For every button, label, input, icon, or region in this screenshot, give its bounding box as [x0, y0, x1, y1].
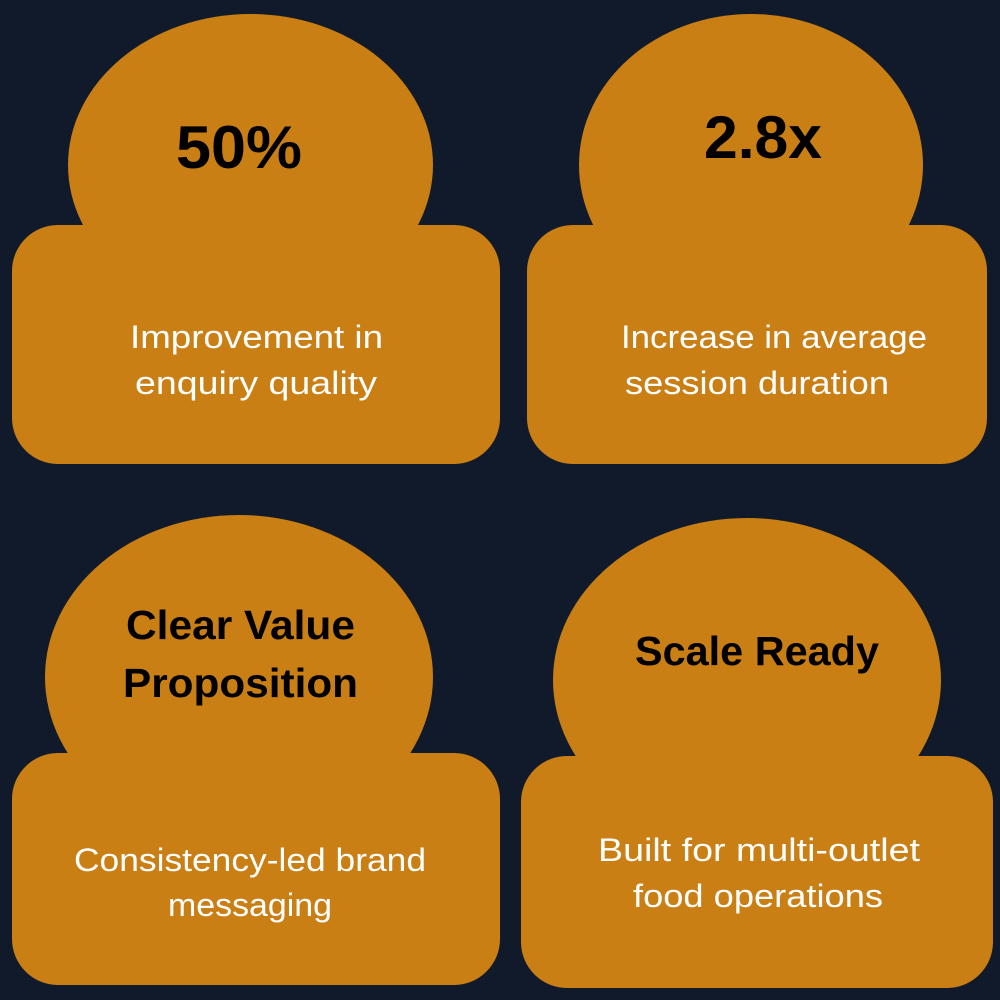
stat: 2.8x: 2.8x — [704, 104, 822, 171]
panel: scale ready — [521, 518, 993, 988]
description: enquiry quality — [130, 319, 383, 401]
panel: 50% enquiry quality — [12, 14, 500, 464]
description: brand messaging: Consistency-led brand — [74, 842, 426, 878]
description: enquiry quality: Improvement in — [130, 319, 383, 355]
badge shape: bottom left — [12, 515, 500, 985]
panel: 2.8x session duration — [527, 14, 987, 464]
stat: 50%: 50% — [176, 114, 302, 181]
description: multi-outlet operations: Built for multi-outlet — [598, 832, 920, 868]
description: enquiry quality: enquiry quality — [135, 365, 377, 401]
description: brand messaging — [74, 842, 426, 923]
badge shape: top right — [527, 14, 987, 464]
heading: clear value proposition: Proposition — [123, 660, 358, 706]
heading: scale ready: Scale Ready — [635, 628, 879, 674]
heading: clear value proposition — [123, 602, 358, 706]
description: session duration — [621, 319, 927, 401]
description: session duration: session duration — [625, 365, 889, 401]
badge shape: bottom right — [521, 518, 993, 988]
description: brand messaging: messaging — [168, 887, 332, 923]
description: multi-outlet operations — [598, 832, 920, 914]
description: multi-outlet operations: food operations — [633, 878, 883, 914]
badge shape: top left — [12, 14, 500, 464]
description: session duration: Increase in average — [621, 319, 927, 355]
heading: clear value proposition: Clear Value — [126, 602, 355, 648]
panel: clear value proposition — [12, 515, 500, 985]
